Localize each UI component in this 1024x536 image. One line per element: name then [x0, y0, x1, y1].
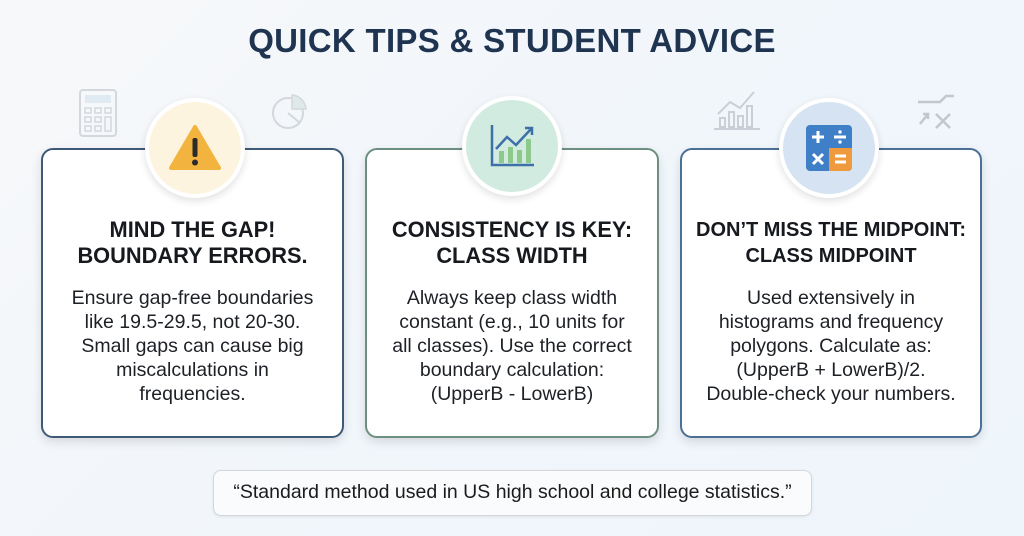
text block: like 19.5-29.5, not 20-30.: [85, 311, 300, 333]
icon: calculator: [779, 98, 879, 198]
title: QUICK TIPS & STUDENT ADVICE: [248, 22, 776, 59]
text block: (UpperB + LowerB)/2.: [736, 359, 926, 381]
text block: Used extensively in: [747, 287, 915, 309]
text block: [706, 287, 956, 405]
heading: [392, 217, 632, 268]
heading: CLASS MIDPOINT: [745, 245, 917, 267]
icon: decorative function symbol: [918, 94, 954, 129]
callout: quote: [213, 470, 812, 516]
text block: all classes). Use the correct: [392, 335, 632, 357]
text block: Ensure gap-free boundaries: [72, 287, 313, 309]
icon: decorative pie chart: [272, 94, 307, 129]
heading: CLASS WIDTH: [436, 243, 588, 268]
heading: BOUNDARY ERRORS.: [77, 243, 308, 268]
heading: DON’T MISS THE MIDPOINT:: [696, 219, 966, 241]
heading: [696, 219, 966, 267]
text block: Always keep class width: [407, 287, 617, 309]
text block: [72, 287, 313, 405]
text block: boundary calculation:: [420, 359, 604, 381]
text block: frequencies.: [139, 383, 246, 405]
callout: quote: “Standard method used in US high school and college statistics.”: [233, 481, 792, 503]
panel: mind the gap: [41, 148, 344, 438]
icon: growth chart: [462, 96, 562, 196]
panel: midpoint: [680, 148, 982, 438]
text block: polygons. Calculate as:: [730, 335, 932, 357]
text block: constant (e.g., 10 units for: [399, 311, 625, 333]
heading: CONSISTENCY IS KEY:: [392, 217, 632, 242]
icon: decorative bar chart: [714, 92, 760, 130]
icon: decorative calculator: [79, 89, 117, 137]
text block: histograms and frequency: [719, 311, 943, 333]
icon: warning: [145, 98, 245, 198]
heading: MIND THE GAP!: [110, 217, 275, 242]
text block: Small gaps can cause big: [81, 335, 304, 357]
text block: Double-check your numbers.: [706, 383, 956, 405]
text block: [392, 287, 632, 405]
text block: miscalculations in: [116, 359, 269, 381]
heading: [77, 217, 308, 268]
panel: consistency: [365, 148, 659, 438]
text block: (UpperB - LowerB): [431, 383, 593, 405]
